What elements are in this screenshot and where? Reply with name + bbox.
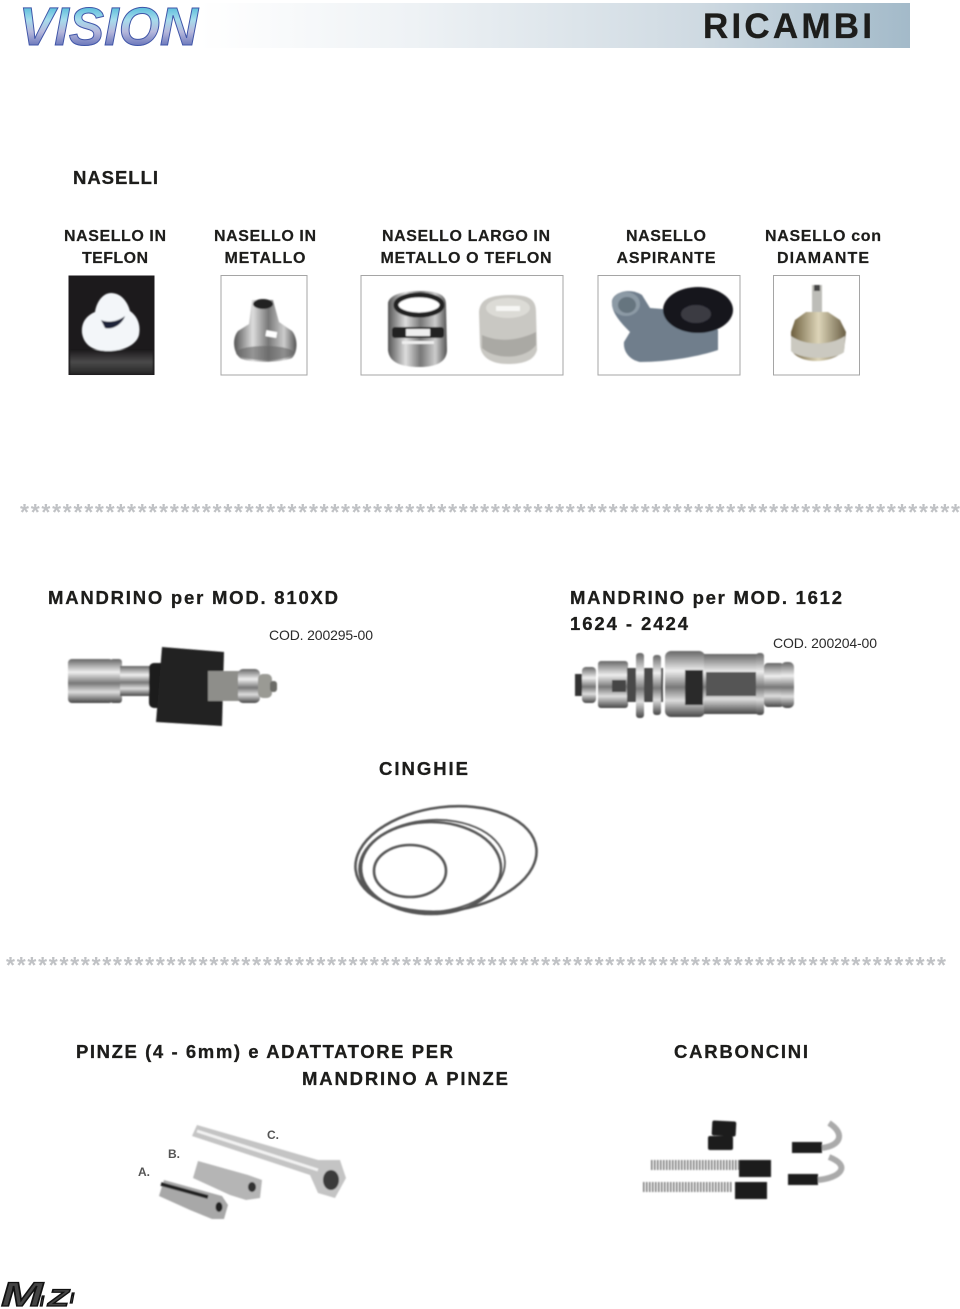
photo: teflon nozzle [68, 276, 154, 375]
heading: pinze: PINZE (4 - 6mm) e ADATTATORE PER [76, 1041, 453, 1062]
heading: mandrino 1612: 1624 - 2424 [570, 613, 689, 634]
heading: Naselli: NASELLI [73, 167, 158, 188]
logo: Mizi [1, 1276, 75, 1309]
photo: suction nozzle [598, 276, 740, 375]
logo: Mizi: i [70, 1290, 75, 1306]
photo: mandrino 1612 [575, 651, 794, 718]
heading: carboncini: CARBONCINI [674, 1041, 808, 1062]
divider: asterisks upper: **************************************************************************************** [20, 499, 960, 525]
product labels: naselli: DIAMANTE [777, 250, 869, 267]
code: 200204-00: COD. 200204-00 [773, 635, 877, 651]
divider: asterisks lower: **************************************************************************************** [6, 952, 946, 978]
header band [200, 3, 910, 48]
heading: pinze: MANDRINO A PINZE [302, 1068, 508, 1089]
heading: mandrino 1612: MANDRINO per MOD. 1612 [570, 587, 842, 608]
photo: collets A B C [138, 1125, 346, 1219]
heading: pinze [76, 1041, 508, 1089]
photo: wide nozzles [361, 276, 563, 375]
product labels: naselli: NASELLO [626, 228, 706, 245]
product labels: naselli: NASELLO LARGO IN [382, 228, 550, 245]
photo: metal nozzle [221, 276, 307, 375]
photo: mandrino 810XD [68, 647, 277, 726]
product labels: naselli: NASELLO IN [214, 228, 316, 245]
labels: A B C: C. [267, 1128, 279, 1142]
product labels: naselli [64, 228, 881, 267]
photo: diamond nozzle [774, 276, 860, 375]
labels: A B C: B. [168, 1147, 180, 1161]
product labels: naselli: TEFLON [82, 250, 148, 267]
labels: A B C [138, 1128, 279, 1179]
code: 200295-00: COD. 200295-00 [269, 627, 373, 643]
product labels: naselli: NASELLO IN [64, 228, 166, 245]
heading: mandrino 810XD: MANDRINO per MOD. 810XD [48, 587, 338, 608]
labels: A B C: A. [138, 1165, 150, 1179]
product labels: naselli: ASPIRANTE [616, 250, 716, 267]
heading: cinghie: CINGHIE [379, 758, 468, 779]
logo: Mizi: i [40, 1293, 45, 1309]
photo: belts [349, 796, 543, 922]
title: RICAMBI [703, 7, 872, 46]
product labels: naselli: METALLO [224, 250, 306, 267]
product labels: naselli: NASELLO con [765, 228, 881, 245]
product labels: naselli: METALLO O TEFLON [380, 250, 552, 267]
photo: carbon brushes [643, 1120, 841, 1199]
heading: mandrino 1612 [570, 587, 842, 634]
